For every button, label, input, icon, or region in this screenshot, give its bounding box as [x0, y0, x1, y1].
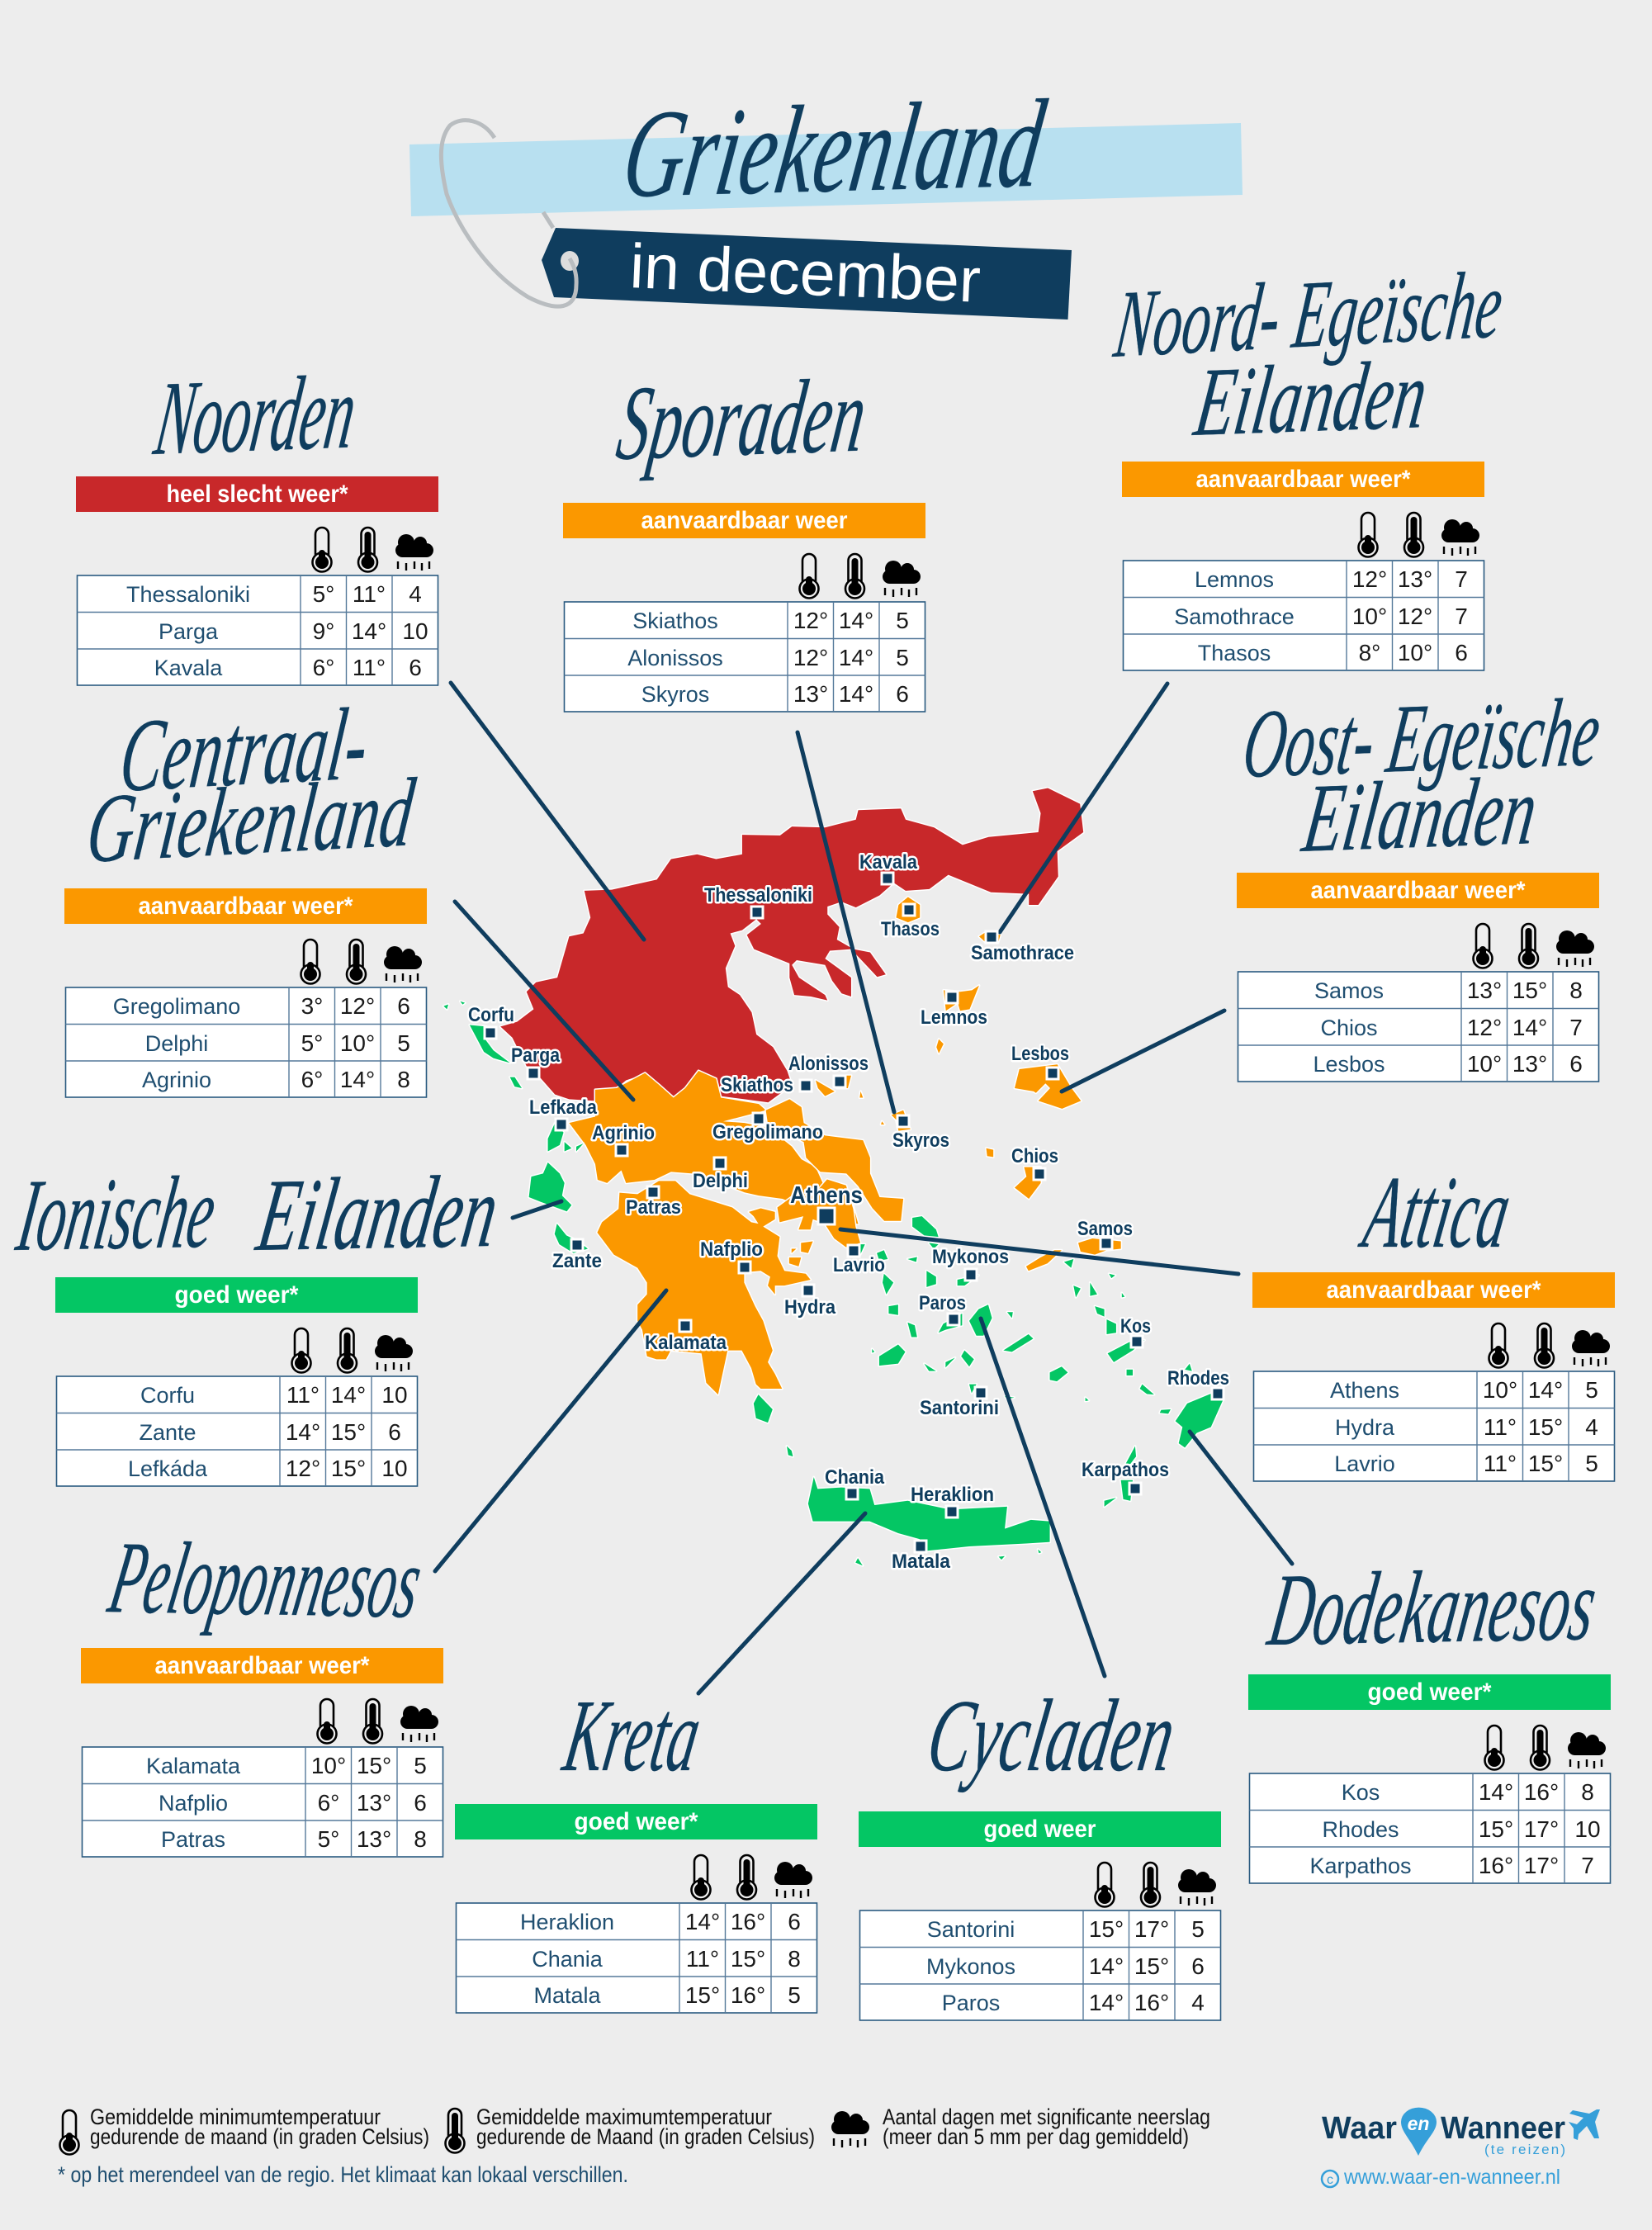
panel: Dodekanesos: Kos [1342, 1780, 1380, 1805]
logo: Waar en Wanneer: Waar [1322, 2111, 1397, 2146]
panel: Centraal-Griekenland: 5 [397, 1030, 410, 1056]
panel: Ionische Eilanden: 6 [388, 1419, 401, 1445]
city labels: Kos [1120, 1315, 1151, 1338]
city labels: Alonissos [788, 1053, 869, 1075]
panel: Oost-Egeische Eilanden: 13° [1467, 978, 1502, 1003]
logo: Waar en Wanneer: c [1327, 2173, 1333, 2187]
panel: Sporaden: 14° [839, 645, 873, 670]
panel: Noorden: 10 [402, 618, 428, 644]
panel: Centraal-Griekenland: 5° [301, 1030, 323, 1056]
panel: Peloponnesos: 15° [357, 1753, 391, 1778]
tag: in december [542, 228, 1072, 320]
city labels: Skiathos [721, 1074, 793, 1096]
city labels: Samos [1077, 1218, 1133, 1240]
panel: Peloponnesos [81, 1521, 443, 1857]
panel: Centraal-Griekenland: 8 [397, 1067, 410, 1092]
panel: Noorden: 14° [352, 618, 386, 644]
panel: Kreta: Kreta [556, 1679, 708, 1793]
legend text: maximum temperature [476, 2105, 815, 2149]
region: north [500, 788, 1083, 1102]
panel: Ionische Eilanden: Lefkáda [128, 1456, 208, 1481]
panel: Centraal-Griekenland: 10° [340, 1030, 375, 1056]
panel: Dodekanesos: 15° [1479, 1816, 1513, 1842]
panel: Centraal-Griekenland: 6° [301, 1067, 323, 1092]
region: central Greece and islands (orange) [569, 897, 1081, 1224]
panel: Noord-Egeische Eilanden: 7 [1455, 604, 1468, 629]
panel: Cycladen: Cycladen [920, 1679, 1183, 1793]
panel: Peloponnesos: Nafplio [159, 1791, 228, 1816]
panel: Dodekanesos: 16° [1524, 1779, 1559, 1805]
panel: Kreta: 15° [685, 1982, 720, 2008]
panel: Attica: 11° [1484, 1451, 1517, 1476]
panel: Kreta: Matala [533, 1983, 601, 2008]
city labels: Thasos [881, 918, 940, 940]
panel: Cycladen: 15° [1134, 1953, 1169, 1979]
city labels: Hydra [784, 1296, 836, 1319]
city labels: Parga [511, 1044, 561, 1067]
panel: Noord-Egeische Eilanden: 13° [1398, 566, 1432, 592]
panel: Centraal-Griekenland: aanvaardbaar weer* [139, 892, 353, 920]
panel: Peloponnesos: Peloponnesos [101, 1521, 430, 1640]
panel: Sporaden: 6 [896, 681, 909, 707]
legend text: minimum temperature [90, 2105, 429, 2149]
tag string [441, 121, 576, 306]
panel: Kreta: 16° [731, 1909, 765, 1934]
panel: Noorden: Thessaloniki [126, 582, 250, 607]
panel: Attica: 15° [1528, 1451, 1563, 1476]
panel: Oost-Egeische Eilanden: 15° [1512, 978, 1547, 1003]
panel: Noorden: Parga [159, 619, 219, 644]
city labels: Rhodes [1167, 1367, 1229, 1390]
panel: Dodekanesos: Karpathos [1309, 1854, 1412, 1878]
city labels: Thessaloniki [704, 884, 812, 907]
panel: Ionische Eilanden: 12° [286, 1456, 320, 1481]
legend text: maximum temperature: gedurende de Maand (in graden Celsius) [476, 2124, 815, 2149]
panel: Peloponnesos: 6 [414, 1790, 427, 1816]
region: Crete, Cyclades, Dodecanese [555, 1216, 1223, 1565]
panel: Centraal-Griekenland: 12° [340, 993, 375, 1019]
panel: Dodekanesos [1248, 1548, 1611, 1883]
panel: Ionische Eilanden: Corfu [140, 1383, 195, 1408]
legend [59, 2105, 1210, 2155]
panel: Attica: Lavrio [1334, 1451, 1395, 1476]
panel: Noorden: 9° [313, 618, 334, 644]
panel: Noord-Egeische Eilanden: Thasos [1198, 641, 1271, 665]
city labels: Lefkada [529, 1096, 598, 1119]
panel: Oost-Egeische Eilanden: 8 [1569, 978, 1583, 1003]
panel: Attica: Attica [1353, 1156, 1518, 1270]
panel: Noord-Egeische Eilanden: Lemnos [1195, 567, 1274, 592]
panel: Noord-Egeische Eilanden: 10° [1352, 604, 1387, 629]
panel: Sporaden: Skyros [641, 682, 709, 707]
city labels: Corfu [468, 1004, 514, 1026]
panel: Dodekanesos: 10 [1574, 1816, 1601, 1842]
panel: Noorden: 11° [353, 655, 386, 680]
panel: Noord-Egeische Eilanden: Eilanden [1188, 340, 1434, 457]
city labels: Chios [1011, 1145, 1058, 1167]
panel: Dodekanesos: 17° [1524, 1816, 1559, 1842]
panel: Noord-Egeische Eilanden: 12° [1352, 566, 1387, 592]
panel: Attica: Hydra [1335, 1415, 1395, 1440]
panel: Oost-Egeische Eilanden: 12° [1467, 1015, 1502, 1040]
panel: Attica [1252, 1156, 1615, 1481]
panel: Sporaden: 13° [793, 681, 828, 707]
panel: Kreta: Heraklion [520, 1910, 614, 1934]
legend text: minimum temperature: Gemiddelde minimumtemperatuur [90, 2105, 381, 2129]
panel: Cycladen: 14° [1089, 1953, 1124, 1979]
panel: Oost-Egeische Eilanden: Chios [1320, 1016, 1378, 1040]
panel: Noorden [76, 353, 438, 685]
panel: Noord-Egeische Eilanden: aanvaardbaar weer* [1195, 466, 1411, 493]
panel: Dodekanesos: goed weer* [1367, 1678, 1492, 1706]
city labels: Agrinio [592, 1122, 655, 1144]
panel: Oost-Egeische Eilanden: 6 [1569, 1051, 1583, 1077]
city labels: Patras [626, 1196, 681, 1219]
panel: Noord-Egeische Eilanden: Samothrace [1174, 604, 1295, 629]
legend text: precipitation [883, 2105, 1210, 2149]
panel: Dodekanesos: 16° [1479, 1853, 1513, 1878]
city labels: Zante [552, 1250, 602, 1272]
city labels [468, 851, 1229, 1573]
city labels: Mykonos [932, 1246, 1009, 1268]
panel: Ionische Eilanden: Ionische [10, 1155, 223, 1273]
panel: Centraal-Griekenland: Gregolimano [113, 994, 240, 1019]
legend text: maximum temperature: Gemiddelde maximumtemperatuur [476, 2105, 772, 2129]
panel: Centraal-Griekenland [64, 686, 427, 1097]
panel: Cycladen: 16° [1134, 1990, 1169, 2015]
panel: Ionische Eilanden: 15° [331, 1419, 366, 1445]
panel: Ionische Eilanden: 14° [286, 1419, 320, 1445]
panel: Kreta: 15° [731, 1946, 765, 1972]
legend text: precipitation: (meer dan 5 mm per dag gemiddeld) [883, 2124, 1189, 2149]
panel: Noord-Egeische Eilanden: 7 [1455, 566, 1468, 592]
city labels: Lemnos [921, 1006, 987, 1029]
panel: Attica: aanvaardbaar weer* [1326, 1276, 1541, 1304]
panel: Oost-Egeische Eilanden: 13° [1512, 1051, 1547, 1077]
panel: Attica: 14° [1528, 1377, 1563, 1403]
legend text: minimum temperature: gedurende de maand (in graden Celsius) [90, 2124, 429, 2149]
panel: Oost-Egeische Eilanden: Samos [1314, 978, 1384, 1003]
panel: Ionische Eilanden [10, 1155, 505, 1486]
title: Griekenland: Griekenland [615, 74, 1053, 225]
panel: Kreta [455, 1679, 817, 2013]
logo: Waar en Wanneer: www.waar-en-wanneer.nl [1343, 2166, 1560, 2189]
panel: Cycladen: 17° [1134, 1916, 1169, 1942]
panel: Sporaden: 14° [839, 608, 873, 633]
panel: Noorden: 6° [313, 655, 334, 680]
panel: Noorden: Kavala [154, 656, 223, 680]
panel: Peloponnesos: 10° [311, 1753, 346, 1778]
panel: Centraal-Griekenland: Centraal- [115, 686, 374, 814]
city labels: Karpathos [1082, 1459, 1169, 1481]
panel: Cycladen: Santorini [927, 1917, 1015, 1942]
city labels: Lesbos [1011, 1043, 1069, 1065]
city labels: Athens [790, 1182, 863, 1209]
panel: Peloponnesos: aanvaardbaar weer* [155, 1652, 370, 1679]
panel: Attica: 5 [1585, 1377, 1598, 1403]
city labels: Santorini [920, 1397, 999, 1419]
panel: Sporaden: 12° [793, 645, 828, 670]
icon: rain cloud [831, 2111, 869, 2147]
panel: Attica: 4 [1585, 1414, 1598, 1440]
panel: Sporaden: Sporaden [611, 356, 873, 482]
panel: Sporaden [563, 356, 925, 712]
panel: Noord-Egeische Eilanden: 12° [1398, 604, 1432, 629]
panel: Ionische Eilanden: 11° [286, 1382, 320, 1408]
panel: Noord-Egeische Eilanden [1109, 251, 1508, 670]
panel: Kreta: 16° [731, 1982, 765, 2008]
panel: Oost-Egeische Eilanden [1237, 677, 1607, 1082]
panel: Dodekanesos: 17° [1524, 1853, 1559, 1878]
panel: Sporaden: Alonissos [627, 646, 723, 670]
logo: Waar en Wanneer: en [1408, 2113, 1429, 2134]
panel: Peloponnesos: 13° [357, 1790, 391, 1816]
panel: Ionische Eilanden: 15° [331, 1456, 366, 1481]
panel: Ionische Eilanden: goed weer* [175, 1281, 299, 1309]
panel: Peloponnesos: Patras [161, 1827, 225, 1852]
panel: Cycladen: Paros [942, 1991, 1000, 2015]
panel: Cycladen: 4 [1191, 1990, 1205, 2015]
panel: Noord-Egeische Eilanden: 8° [1359, 640, 1380, 665]
panel: Cycladen: 5 [1191, 1916, 1205, 1942]
panel: Attica: 5 [1585, 1451, 1598, 1476]
panel: Noord-Egeische Eilanden: 10° [1398, 640, 1432, 665]
panel: Ionische Eilanden: Zante [139, 1420, 196, 1445]
panel: Attica: 10° [1483, 1377, 1517, 1403]
panel: Peloponnesos: 6° [318, 1790, 339, 1816]
city labels: Chania [825, 1466, 885, 1489]
panel: Cycladen: Mykonos [926, 1954, 1015, 1979]
panel: Sporaden: aanvaardbaar weer [641, 507, 848, 534]
panel: Dodekanesos: Rhodes [1322, 1817, 1399, 1842]
panel: Ionische Eilanden: Eilanden [249, 1155, 505, 1273]
panel: Noorden: Noorden [149, 353, 363, 477]
legend text: precipitation: Aantal dagen met significante neerslag [883, 2105, 1210, 2129]
city labels: Skyros [892, 1129, 949, 1152]
city markers [485, 873, 1224, 1552]
panel: Kreta: 8 [788, 1946, 801, 1972]
city labels: Matala [892, 1551, 951, 1573]
panel: Kreta: 5 [788, 1982, 801, 2008]
panel: Kreta: goed weer* [575, 1808, 698, 1835]
city labels: Paros [919, 1292, 966, 1314]
panel: Kreta: 6 [788, 1909, 801, 1934]
panel: Kreta: 11° [686, 1946, 719, 1972]
city labels: Samothrace [971, 942, 1074, 964]
panel: Noorden: heel slecht weer* [167, 481, 348, 508]
panel: Cycladen: 6 [1191, 1953, 1205, 1979]
icon: maximum thermometer [446, 2109, 464, 2153]
city labels: Heraklion [911, 1484, 994, 1506]
panel: Peloponnesos: 5 [414, 1753, 427, 1778]
logo: Waar en Wanneer: (te reizen) [1484, 2142, 1565, 2157]
panel: Noorden: 6 [409, 655, 422, 680]
panel: Noorden: 5° [313, 581, 334, 607]
panel: Attica: 11° [1484, 1414, 1517, 1440]
panel: Centraal-Griekenland: 14° [340, 1067, 375, 1092]
panel: Noorden: 11° [353, 581, 386, 607]
panel: Centraal-Griekenland: Griekenland [82, 757, 420, 883]
panel: Oost-Egeische Eilanden: 10° [1467, 1051, 1502, 1077]
panel: Kreta: Chania [532, 1947, 604, 1972]
panel: Centraal-Griekenland: Agrinio [142, 1068, 211, 1092]
panel: Sporaden: 5 [896, 608, 909, 633]
city labels: Delphi [693, 1170, 748, 1192]
panel: Peloponnesos: 5° [318, 1826, 339, 1852]
panel: Sporaden: Skiathos [632, 608, 718, 633]
panel: Centraal-Griekenland: 3° [301, 993, 323, 1019]
region: Ionian islands [443, 1001, 584, 1211]
panel: Noorden: 4 [409, 581, 422, 607]
panel: Cycladen [859, 1679, 1221, 2020]
panel: Sporaden: 12° [793, 608, 828, 633]
panel: Peloponnesos: Kalamata [146, 1754, 241, 1778]
panel: Ionische Eilanden: 10 [381, 1456, 408, 1481]
panel: Cycladen: 14° [1089, 1990, 1124, 2015]
panel: Oost-Egeische Eilanden: aanvaardbaar weer* [1311, 877, 1526, 904]
city labels: Lavrio [833, 1254, 885, 1276]
panel: Oost-Egeische Eilanden: Lesbos [1313, 1052, 1385, 1077]
logo: Waar en Wanneer: Wanneer [1441, 2111, 1565, 2146]
icon: minimum thermometer [59, 2110, 79, 2155]
panel: Attica: 15° [1528, 1414, 1563, 1440]
logo: Waar en Wanneer [1322, 2108, 1600, 2189]
panel: Dodekanesos: 14° [1479, 1779, 1513, 1805]
panel: Cycladen: 15° [1089, 1916, 1124, 1942]
panel: Cycladen: goed weer [984, 1816, 1096, 1843]
panel: Attica: Athens [1330, 1378, 1399, 1403]
panel: Noord-Egeische Eilanden: 6 [1455, 640, 1468, 665]
panel: Dodekanesos: 7 [1581, 1853, 1594, 1878]
city labels: Nafplio [700, 1238, 763, 1261]
panel: Sporaden: 5 [896, 645, 909, 670]
city labels: Kavala [859, 851, 918, 874]
title banner [409, 74, 1243, 225]
panel: Kreta: 14° [685, 1909, 720, 1934]
panel: Centraal-Griekenland: Delphi [145, 1031, 208, 1056]
city labels: Gregolimano [712, 1121, 823, 1143]
city labels: Kalamata [645, 1332, 727, 1354]
panel: Ionische Eilanden: 10 [381, 1382, 408, 1408]
panel: Peloponnesos: 13° [357, 1826, 391, 1852]
panel: Oost-Egeische Eilanden: 14° [1512, 1015, 1547, 1040]
panel: Centraal-Griekenland: 6 [397, 993, 410, 1019]
leader lines [435, 683, 1292, 1693]
footnote: * op het merendeel van de regio. Het klimaat kan lokaal verschillen. [58, 2162, 628, 2187]
panel: Peloponnesos: 8 [414, 1826, 427, 1852]
panel: Ionische Eilanden: 14° [331, 1382, 366, 1408]
region: Peloponnese, Attica, Samos (orange) [597, 1180, 1121, 1394]
map of Greece [443, 788, 1223, 1565]
panel: Dodekanesos: 8 [1581, 1779, 1594, 1805]
tag: in december: in december [628, 231, 982, 316]
panel: Sporaden: 14° [839, 681, 873, 707]
panel: Oost-Egeische Eilanden: 7 [1569, 1015, 1583, 1040]
